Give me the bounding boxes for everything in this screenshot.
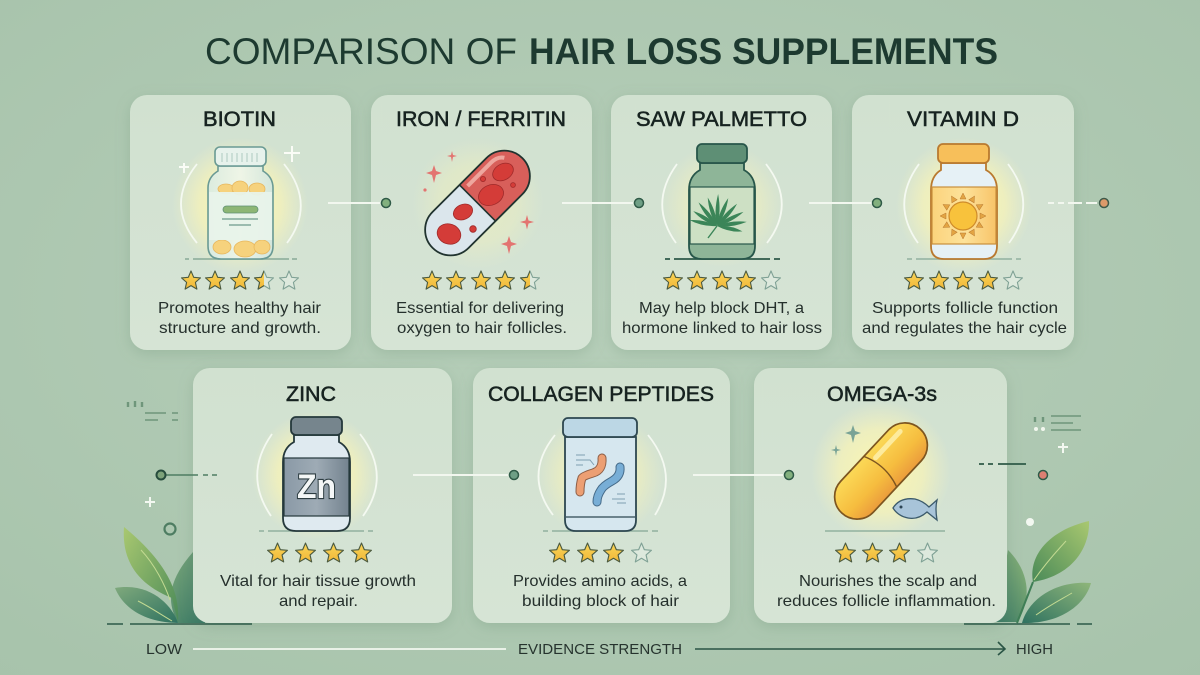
connector: row one xyxy=(328,198,1108,208)
left leaf decoration xyxy=(115,527,205,623)
connector: row two xyxy=(156,464,1048,480)
heading: SAW PALMETTO xyxy=(636,108,807,131)
heading: VITAMIN D xyxy=(907,108,1019,131)
right small marks xyxy=(1034,416,1081,431)
description: and repair. xyxy=(279,593,358,610)
description: Provides amino acids, a xyxy=(513,573,687,590)
label: high: HIGH xyxy=(1016,641,1053,658)
heading: IRON / FERRITIN xyxy=(396,108,566,131)
description xyxy=(513,573,687,610)
description: Supports follicle function xyxy=(872,300,1058,317)
heading: COLLAGEN PEPTIDES xyxy=(488,383,714,406)
left small marks xyxy=(128,401,178,420)
heading: OMEGA-3s xyxy=(827,383,937,406)
icon: bottle with sun label xyxy=(896,137,1032,273)
description: May help block DHT, a xyxy=(639,300,804,317)
icon: green bottle with palm leaf xyxy=(660,143,784,267)
description: oxygen to hair follicles. xyxy=(397,320,567,337)
description xyxy=(158,300,322,337)
icon: collagen jar xyxy=(536,411,666,539)
arrow xyxy=(695,642,1005,655)
card background xyxy=(852,95,1074,350)
card: Vitamin D xyxy=(852,95,1074,350)
card: Collagen Peptides xyxy=(473,368,730,623)
card background xyxy=(611,95,832,350)
label: evidence strength: EVIDENCE STRENGTH xyxy=(518,641,682,658)
card background xyxy=(473,368,730,623)
icon: zinc bottle xyxy=(252,411,380,539)
description xyxy=(396,300,567,337)
rating: 4 of 5 stars xyxy=(904,271,1022,289)
description: hormone linked to hair loss xyxy=(622,320,822,337)
icon: glass bottle with capsules xyxy=(172,137,308,273)
rating: 3 of 4 stars xyxy=(836,543,937,562)
description: Nourishes the scalp and xyxy=(799,573,977,590)
card: Omega-3s xyxy=(754,368,1007,623)
title: HAIR LOSS SUPPLEMENTS xyxy=(529,31,998,72)
left plus and ring xyxy=(145,497,176,534)
heading: BIOTIN xyxy=(203,108,276,131)
description: and regulates the hair cycle xyxy=(862,320,1067,337)
rating: 3.5 of 5 stars xyxy=(182,271,298,289)
description xyxy=(862,300,1067,337)
description xyxy=(777,573,996,610)
description: Essential for delivering xyxy=(396,300,564,317)
description: reduces follicle inflammation. xyxy=(777,593,996,610)
card background xyxy=(754,368,1007,623)
description xyxy=(622,300,822,337)
right leaf decoration xyxy=(995,521,1091,623)
heading: ZINC xyxy=(286,383,336,406)
description: structure and growth. xyxy=(159,320,321,337)
card background xyxy=(193,368,452,623)
icon: zinc bottle: Zn xyxy=(297,468,336,506)
right plus and dot xyxy=(1026,443,1068,526)
rating: 4 of 5 stars xyxy=(664,271,780,289)
icon: omega capsule with fish xyxy=(811,401,951,541)
description xyxy=(220,573,416,610)
icon: red and silver capsule xyxy=(412,137,544,269)
card background xyxy=(130,95,351,350)
rating: 4 stars xyxy=(268,543,371,562)
card: Zinc xyxy=(193,368,452,623)
description: Promotes healthy hair xyxy=(158,300,322,317)
evidence strength axis xyxy=(146,641,1053,658)
title xyxy=(205,31,998,72)
card: Saw Palmetto xyxy=(611,95,832,350)
card: Iron / Ferritin xyxy=(371,95,592,350)
description: Vital for hair tissue growth xyxy=(220,573,416,590)
card background xyxy=(371,95,592,350)
description: building block of hair xyxy=(522,593,680,610)
rating: 3 of 4 stars xyxy=(550,543,651,562)
rating: 4.5 of 5 stars xyxy=(422,271,540,289)
title: COMPARISON OF xyxy=(205,31,517,72)
label: low: LOW xyxy=(146,641,183,658)
ground lines under leaves xyxy=(107,623,1092,625)
card: Biotin xyxy=(130,95,351,350)
